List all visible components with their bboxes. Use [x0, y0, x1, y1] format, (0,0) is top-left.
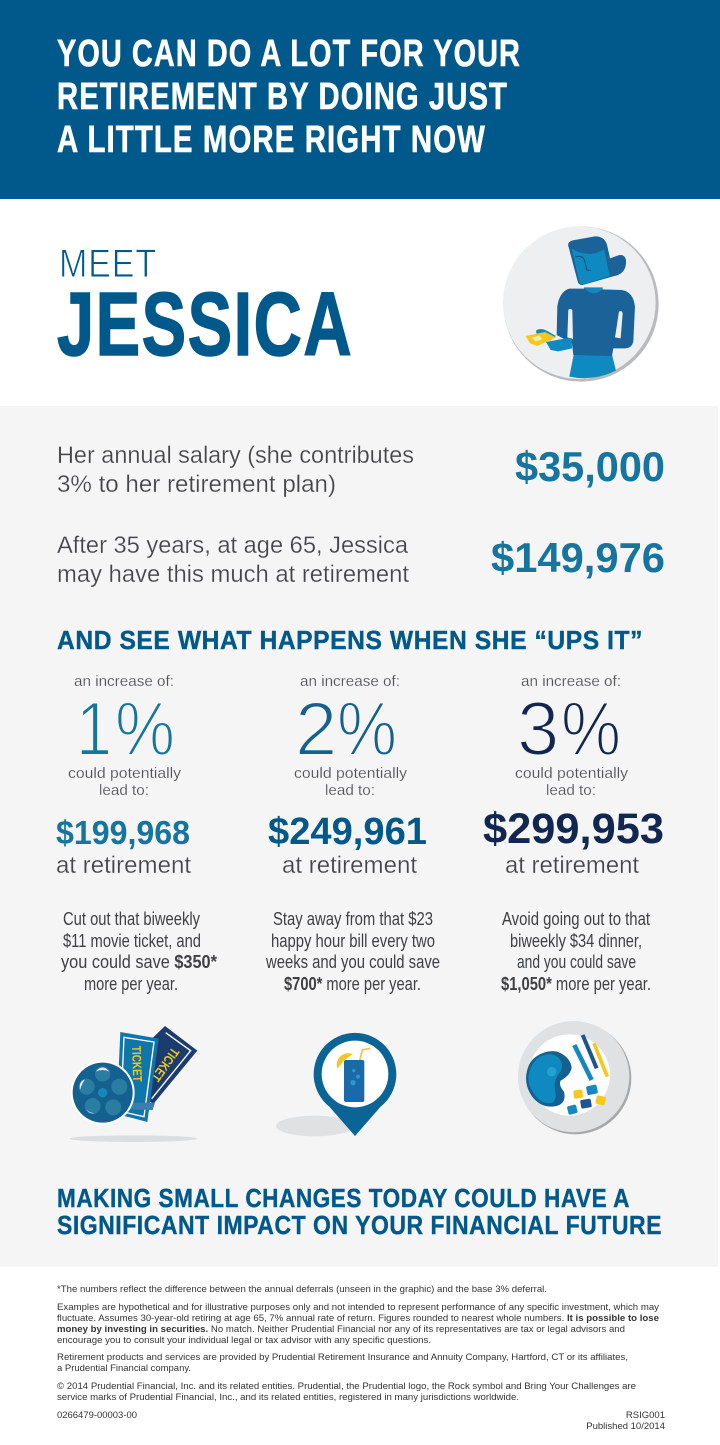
- column: 2 percent: could potentially: [294, 765, 408, 782]
- header banner: [0, 0, 720, 199]
- column: 1 percent: an increase of:: [74, 673, 174, 690]
- column: 1 percent: $11 movie ticket, and: [63, 931, 201, 951]
- text: after 35 years: [57, 532, 409, 588]
- column: 2 percent: at retirement: [282, 852, 417, 879]
- figure: salary: $35,000: [515, 443, 665, 490]
- footnotes: money by investing in securities. No match. Neither Prudential Financial nor any of its representatives are tax or legal advisors and: [57, 1324, 625, 1335]
- column: 3 percent: and you could save: [517, 952, 636, 972]
- title: RETIREMENT BY DOING JUST: [57, 76, 508, 118]
- column: 1 percent: could potentially: [68, 765, 182, 782]
- column: 1 percent: at retirement: [56, 852, 191, 879]
- column: 2 percent: $700* more per year.: [284, 974, 421, 994]
- footnotes: RSIG001: [626, 1410, 665, 1421]
- heading: meet Jessica: MEET: [59, 242, 157, 286]
- column: 3 percent: %: [561, 687, 621, 772]
- footnotes: a Prudential Financial company.: [57, 1363, 191, 1374]
- heading: meet Jessica: JESSICA: [57, 275, 353, 375]
- column: 1 percent: more per year.: [84, 974, 178, 994]
- text: after 35 years: may have this much at retirement: [57, 561, 409, 588]
- title: A LITTLE MORE RIGHT NOW: [57, 119, 486, 161]
- column: 1 percent: Cut out that biweekly: [63, 909, 200, 929]
- column: 2 percent: [265, 673, 440, 994]
- column: 3 percent: at retirement: [505, 852, 639, 879]
- column: 1 percent: %: [115, 687, 175, 772]
- column: 2 percent: Stay away from that $23: [273, 909, 433, 929]
- column: 2 percent: %: [337, 687, 397, 772]
- footnotes: encourage you to consult your individual legal or tax advisor with any specific questions.: [57, 1335, 431, 1346]
- column: 2 percent: weeks and you could save: [265, 952, 440, 972]
- closing statement: [57, 1183, 662, 1240]
- text: annual salary: 3% to her retirement plan): [57, 471, 336, 498]
- closing statement: MAKING SMALL CHANGES TODAY COULD HAVE A: [57, 1183, 630, 1213]
- title: [57, 33, 521, 161]
- column: 1 percent: 1: [76, 687, 112, 772]
- footnotes: [57, 1284, 665, 1432]
- column: 1 percent: [56, 673, 217, 994]
- column: 3 percent: Avoid going out to that: [502, 909, 650, 929]
- column: 2 percent: happy hour bill every two: [271, 931, 435, 951]
- text: annual salary: [57, 442, 414, 498]
- footnotes: fluctuate. Assumes 30-year-old retiring at age 65, 7% annual rate of return. Figures rounded to nearest whole numbers. It is possible to lose: [57, 1313, 659, 1324]
- footnotes: © 2014 Prudential Financial, Inc. and its related entities. Prudential, the Prudential logo, the Rock symbol and Bring Your Challenges are: [57, 1381, 636, 1392]
- column: 3 percent: could potentially: [515, 765, 629, 782]
- footnotes: 0266479-00003-00: [57, 1410, 137, 1421]
- column: 3 percent: 3: [517, 687, 559, 772]
- icon: film reel and tickets: [69, 1026, 197, 1142]
- footnotes: service marks of Prudential Financial, Inc., and its related entities, registered in many jurisdictions worldwide.: [57, 1392, 519, 1403]
- footnotes: Examples are hypothetical and for illustrative purposes only and not intended to represent performance of any specific investment, which may: [57, 1302, 659, 1313]
- icon: film reel and tickets: TICKET: [148, 1045, 182, 1084]
- icon: dinner plate: [518, 1021, 631, 1134]
- icon: film reel and tickets: TICKET: [129, 1046, 144, 1082]
- icon: drink location pin: [276, 1033, 396, 1136]
- column: 3 percent: lead to:: [546, 782, 596, 799]
- footnotes: *The numbers reflect the difference between the annual deferrals (unseen in the graphic) and the base 3% deferral.: [57, 1284, 547, 1295]
- column: 3 percent: $1,050* more per year.: [501, 974, 651, 994]
- text: after 35 years: After 35 years, at age 65, Jessica: [57, 532, 409, 559]
- figure: retirement base: $149,976: [491, 534, 665, 581]
- footnotes: Retirement products and services are provided by Prudential Retirement Insurance and Annuity Company, Hartford, CT or its affiliates,: [57, 1352, 628, 1363]
- text: annual salary: Her annual salary (she contributes: [57, 442, 414, 469]
- icon: Jessica portrait: [503, 226, 659, 382]
- heading: meet Jessica: [57, 242, 353, 375]
- column: 2 percent: an increase of:: [300, 673, 400, 690]
- column: 2 percent: $249,961: [268, 811, 427, 853]
- column: 3 percent: an increase of:: [521, 673, 621, 690]
- column: 1 percent: $199,968: [56, 814, 190, 851]
- column: 1 percent: you could save $350*: [61, 952, 217, 972]
- column: 2 percent: 2: [295, 687, 337, 772]
- title: YOU CAN DO A LOT FOR YOUR: [57, 33, 521, 75]
- heading: ups it: AND SEE WHAT HAPPENS WHEN SHE “UPS IT”: [57, 625, 643, 655]
- column: 3 percent: biweekly $34 dinner,: [510, 931, 642, 951]
- column: 1 percent: lead to:: [99, 782, 149, 799]
- footnotes: Published 10/2014: [586, 1421, 665, 1432]
- panel: Jessica's savings: [0, 406, 718, 1267]
- column: 2 percent: lead to:: [325, 782, 375, 799]
- column: 3 percent: $299,953: [483, 805, 664, 853]
- column: 3 percent: [483, 673, 664, 994]
